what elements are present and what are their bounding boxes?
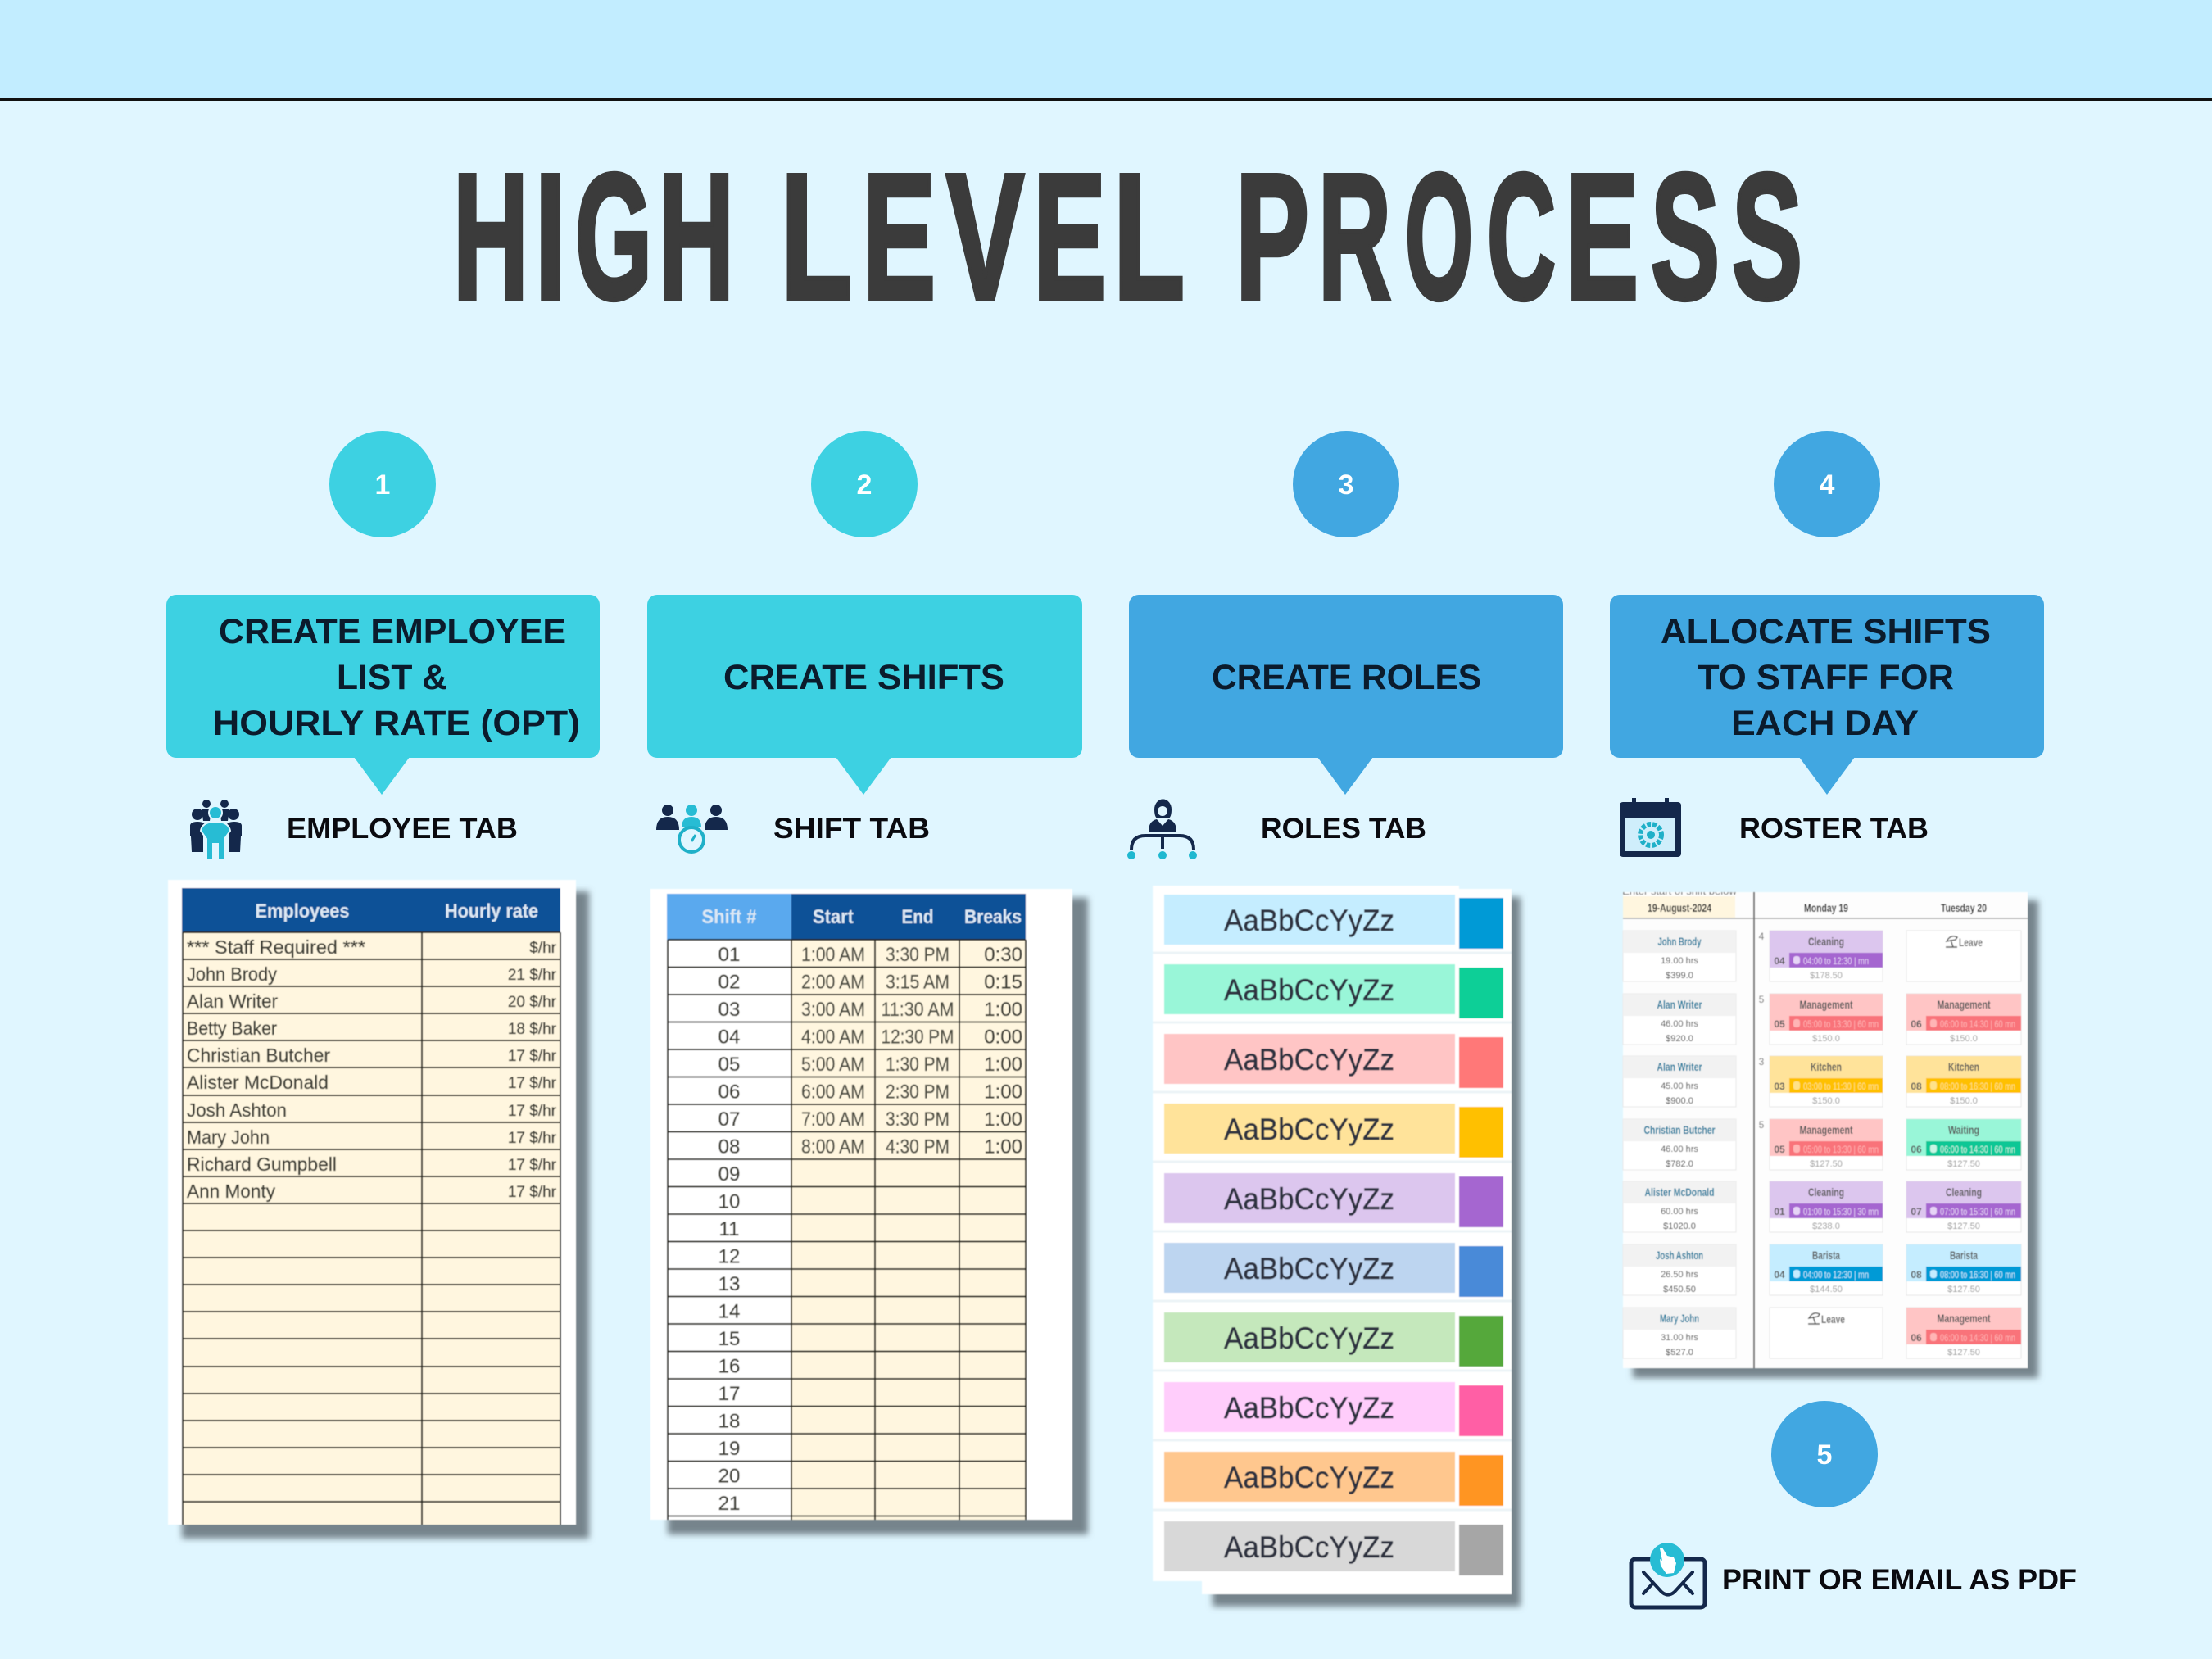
title: S <box>1651 138 1720 337</box>
roster day headers: Tuesday 20 <box>1941 901 1987 914</box>
role swatch: grey <box>1164 1521 1503 1575</box>
role swatch: orange: AaBbCcYyZz <box>1224 1461 1394 1494</box>
shift numbers: 10 <box>718 1191 740 1213</box>
staff card: Mary John: Mary John <box>1660 1312 1699 1325</box>
tuesday card: Alister cleaning: 07:00 to 15:30 | 60 mn <box>1940 1206 2015 1217</box>
title: V <box>946 138 1024 337</box>
tuesday card: Alan Writer management <box>1906 994 2021 1045</box>
title: S <box>1732 138 1802 337</box>
shift numbers <box>718 944 740 1515</box>
shift counts: 4 <box>1759 931 1765 942</box>
tuesday card: barista <box>1906 1244 2021 1295</box>
monday card: Christian management: 05 <box>1774 1144 1785 1155</box>
monday card: Alan Writer management: 05 <box>1774 1018 1785 1030</box>
shift breaks: 0:30 <box>984 944 1022 966</box>
staff card: Alister McDonald: 60.00 hrs <box>1661 1207 1698 1217</box>
tuesday card: waiting <box>1906 1119 2021 1170</box>
step number 2: 2 <box>857 469 872 501</box>
employee names: Ann Monty <box>187 1181 275 1202</box>
staff card: Alan Writer second: $900.0 <box>1666 1096 1693 1106</box>
shift breaks: 1:00 <box>984 999 1022 1021</box>
shift breaks: 1:00 <box>984 1054 1022 1076</box>
staff card: John Brody: 19.00 hrs <box>1661 956 1698 966</box>
hourly rates <box>508 940 557 1201</box>
tuesday card: barista: 08:00 to 16:30 | 60 mn <box>1940 1269 2015 1281</box>
employee names: Christian Butcher <box>187 1045 330 1066</box>
employee names: Josh Ashton <box>187 1099 287 1121</box>
panel: shift table <box>650 889 1088 1534</box>
tuesday card: kitchen: Kitchen <box>1948 1060 1979 1073</box>
employee names <box>187 936 365 1202</box>
title <box>453 138 1802 337</box>
panel: roles list <box>1153 886 1521 1607</box>
roster date header <box>1622 891 1737 918</box>
hourly rates: 17 $/hr <box>508 1184 557 1201</box>
monday card: Christian management: 05:00 to 13:30 | 60 mn <box>1803 1144 1879 1155</box>
staff card: Alan Writer second: Alan Writer <box>1657 1060 1702 1073</box>
role swatch: leaf green <box>1164 1312 1503 1367</box>
shift end times <box>882 944 954 1158</box>
icon: employees group <box>190 800 242 860</box>
role swatch: blue <box>1164 895 1503 949</box>
role swatch: blue: AaBbCcYyZz <box>1224 904 1394 937</box>
staff card: Christian Butcher <box>1623 1119 1736 1170</box>
shift end times: 2:30 PM <box>886 1081 950 1103</box>
shift end times: 3:15 AM <box>886 972 950 993</box>
role swatch: steel blue: AaBbCcYyZz <box>1224 1252 1394 1285</box>
title: E <box>1033 138 1106 337</box>
monday card: Alan Writer management: 05:00 to 13:30 | 60 mn <box>1803 1018 1879 1030</box>
role swatch: grey: AaBbCcYyZz <box>1224 1530 1394 1564</box>
shift end times: 4:30 PM <box>886 1135 950 1158</box>
callout: create employee list: LIST & <box>337 658 447 697</box>
monday card: John Brody cleaning <box>1770 931 1883 981</box>
staff card: Alister McDonald: $1020.0 <box>1663 1222 1696 1231</box>
staff card: Alister McDonald <box>1623 1181 1736 1232</box>
title: E <box>1566 138 1639 337</box>
tuesday card: Alan Writer management: Management <box>1937 998 1991 1011</box>
monday card: Alister cleaning <box>1770 1181 1883 1232</box>
tuesday card: barista: $127.50 <box>1947 1285 1980 1294</box>
shift start times <box>801 944 865 1158</box>
callout: create employee list: CREATE EMPLOYEE <box>219 612 566 651</box>
shift numbers: 02 <box>718 972 740 993</box>
hourly rates: $/hr <box>529 940 557 957</box>
tuesday card: barista: 08 <box>1911 1269 1922 1281</box>
tuesday card: kitchen: 08:00 to 16:30 | 60 mn <box>1940 1081 2015 1092</box>
shift end times: 3:30 PM <box>886 944 950 966</box>
employee names: Mary John <box>187 1126 270 1148</box>
staff card: Alan Writer <box>1623 994 1736 1045</box>
tuesday card: Alan Writer management: 06 <box>1911 1018 1922 1030</box>
hourly rates: 17 $/hr <box>508 1157 557 1174</box>
shift breaks: 0:15 <box>984 972 1022 993</box>
monday card: barista: Barista <box>1812 1249 1840 1262</box>
top band <box>0 0 2212 101</box>
employee names: Betty Baker <box>187 1018 277 1039</box>
role swatch: purple: AaBbCcYyZz <box>1224 1182 1394 1216</box>
tuesday card: barista: Barista <box>1950 1249 1978 1262</box>
shift table header: End <box>901 906 934 928</box>
hourly rates: 17 $/hr <box>508 1075 557 1092</box>
staff card: Christian Butcher: Christian Butcher <box>1643 1123 1716 1136</box>
monday card: John Brody cleaning: $178.50 <box>1810 971 1843 981</box>
title: C <box>1487 138 1556 337</box>
step number 5: 5 <box>1817 1439 1832 1471</box>
callout: allocate shifts: ALLOCATE SHIFTS <box>1661 612 1991 651</box>
monday card: barista: 04 <box>1774 1269 1785 1281</box>
shift table header <box>667 894 1026 940</box>
employee names: Alister McDonald <box>187 1072 329 1093</box>
monday card: Alister cleaning: $238.0 <box>1812 1222 1840 1231</box>
tuesday card: Mary John management: $127.50 <box>1947 1348 1980 1358</box>
tuesday card: waiting: 06 <box>1911 1144 1922 1155</box>
roster day headers <box>1804 901 1987 914</box>
hourly rates: 20 $/hr <box>508 994 557 1011</box>
shift end times: 3:30 PM <box>886 1108 950 1131</box>
shift breaks: 1:00 <box>984 1135 1022 1158</box>
monday card: kitchen: 03 <box>1774 1081 1785 1092</box>
monday card: kitchen: 03:00 to 11:30 | 60 mn <box>1803 1081 1879 1092</box>
step number 1 <box>329 431 436 537</box>
step number 4 <box>1774 431 1880 537</box>
staff card: Josh Ashton: 26.50 hrs <box>1661 1270 1698 1280</box>
shift table header: Breaks <box>964 906 1022 928</box>
shift numbers: 14 <box>718 1301 740 1322</box>
shift numbers: 09 <box>718 1163 740 1185</box>
shift numbers: 01 <box>718 944 740 966</box>
monday card: John Brody cleaning: 04 <box>1774 955 1785 967</box>
employee table header: Employees <box>256 900 349 922</box>
role swatch: yellow <box>1164 1104 1503 1158</box>
employee tab label: EMPLOYEE TAB <box>287 813 518 845</box>
monday card: John Brody cleaning: 04:00 to 12:30 | mn <box>1803 955 1869 967</box>
panel: roster <box>1622 885 2038 1378</box>
tuesday card: kitchen <box>1906 1056 2021 1107</box>
monday card: John Brody cleaning: Cleaning <box>1808 935 1844 948</box>
staff card: Mary John: $527.0 <box>1666 1348 1693 1358</box>
shift breaks: 1:00 <box>984 1108 1022 1131</box>
hourly rates: 17 $/hr <box>508 1130 557 1147</box>
tuesday card: Mary John management: Management <box>1937 1312 1991 1325</box>
shift end times: 1:30 PM <box>886 1054 950 1076</box>
shift counts: 5 <box>1759 1119 1765 1131</box>
shift table header: Start <box>813 906 854 928</box>
monday card: barista: 04:00 to 12:30 | mn <box>1803 1269 1869 1281</box>
staff card: Josh Ashton <box>1623 1244 1736 1295</box>
shift counts: 5 <box>1759 994 1765 1005</box>
tuesday card: John Brody leave: Leave <box>1959 936 1983 949</box>
monday card: barista: $144.50 <box>1810 1285 1843 1294</box>
title: I <box>535 138 566 337</box>
roster date header: 19-August-2024 <box>1648 901 1711 914</box>
shift numbers: 05 <box>718 1054 740 1076</box>
staff card: Mary John <box>1623 1308 1736 1358</box>
panel: employee table <box>168 880 589 1539</box>
employee table body <box>183 932 560 1525</box>
staff card: John Brody <box>1623 931 1736 981</box>
callout: create employee list <box>166 595 600 795</box>
employee names: *** Staff Required *** <box>187 936 365 958</box>
callout: allocate shifts: TO STAFF FOR <box>1698 658 1954 697</box>
staff card: Alan Writer second <box>1623 1056 1736 1107</box>
shift start times: 4:00 AM <box>801 1026 865 1049</box>
role swatch: pink <box>1164 1382 1503 1436</box>
staff card: Christian Butcher: 46.00 hrs <box>1661 1145 1698 1154</box>
staff card: Alan Writer: 46.00 hrs <box>1661 1019 1698 1029</box>
shift tab label: SHIFT TAB <box>773 813 930 845</box>
staff card: Mary John: 31.00 hrs <box>1661 1333 1698 1343</box>
shift start times: 7:00 AM <box>801 1108 865 1131</box>
hourly rates: 17 $/hr <box>508 1048 557 1065</box>
role swatch: green <box>1164 964 1503 1018</box>
shift numbers: 20 <box>718 1465 740 1488</box>
monday card: Christian management: Management <box>1799 1123 1853 1136</box>
shift numbers: 17 <box>718 1383 740 1405</box>
shift counts <box>1759 931 1765 1131</box>
tuesday card: Alister cleaning <box>1906 1181 2021 1232</box>
staff card: Alan Writer: $920.0 <box>1666 1034 1693 1044</box>
tuesday card: Alan Writer management: 06:00 to 14:30 | 60 mn <box>1940 1018 2015 1030</box>
step number 2 <box>811 431 918 537</box>
monday card: barista <box>1770 1244 1883 1295</box>
monday card: Alan Writer management: Management <box>1799 998 1853 1011</box>
step number 4: 4 <box>1820 469 1835 501</box>
shift numbers: 07 <box>718 1108 740 1131</box>
tuesday card: waiting: $127.50 <box>1947 1159 1980 1169</box>
role swatch: red <box>1164 1034 1503 1088</box>
icon: roster calendar <box>1620 798 1681 857</box>
role swatch: pink: AaBbCcYyZz <box>1224 1391 1394 1425</box>
shift numbers: 13 <box>718 1273 740 1295</box>
step number 3: 3 <box>1339 469 1353 501</box>
staff card: Christian Butcher: $782.0 <box>1666 1159 1693 1169</box>
tuesday card: Mary John management: 06:00 to 14:30 | 60 mn <box>1940 1332 2015 1344</box>
tuesday card: kitchen: $150.0 <box>1950 1096 1978 1106</box>
title: L <box>781 138 852 337</box>
shift start times: 5:00 AM <box>801 1054 865 1076</box>
monday card: Alan Writer management: $150.0 <box>1812 1034 1840 1044</box>
shift end times: 11:30 AM <box>882 999 954 1021</box>
shift start times: 1:00 AM <box>801 944 865 966</box>
shift end times: 12:30 PM <box>882 1026 954 1049</box>
tuesday card: Alister cleaning: Cleaning <box>1946 1185 1982 1199</box>
roster date header: Enter start of shift below <box>1622 885 1737 897</box>
roster tab label: ROSTER TAB <box>1739 813 1929 845</box>
shift breaks: 0:00 <box>984 1026 1022 1049</box>
hourly rates: 17 $/hr <box>508 1103 557 1120</box>
shift start times: 2:00 AM <box>801 972 865 993</box>
shift numbers: 12 <box>718 1245 740 1268</box>
employee table header <box>182 888 560 932</box>
tuesday card: Mary John management: 06 <box>1911 1332 1922 1344</box>
shift numbers: 15 <box>718 1328 740 1350</box>
callout: create employee list: HOURLY RATE (OPT) <box>213 704 580 743</box>
step number 3 <box>1293 431 1399 537</box>
staff card: Alan Writer second: 45.00 hrs <box>1661 1081 1698 1091</box>
staff card: Alan Writer: Alan Writer <box>1657 998 1702 1011</box>
monday card: Christian management <box>1770 1119 1883 1170</box>
role swatch: orange <box>1164 1452 1503 1506</box>
callout: create roles <box>1129 595 1563 795</box>
role swatch: red: AaBbCcYyZz <box>1224 1043 1394 1077</box>
employee names: Alan Writer <box>187 990 278 1012</box>
roles tab label: ROLES TAB <box>1261 813 1426 845</box>
print or email label: PRINT OR EMAIL AS PDF <box>1722 1564 2077 1596</box>
tuesday card: Mary John management <box>1906 1308 2021 1358</box>
callout: allocate shifts <box>1610 595 2044 795</box>
staff card: Josh Ashton: $450.50 <box>1663 1285 1696 1294</box>
shift start times: 8:00 AM <box>801 1135 865 1158</box>
role swatch: green: AaBbCcYyZz <box>1224 973 1394 1007</box>
monday card: kitchen: Kitchen <box>1811 1060 1842 1073</box>
role swatch: steel blue <box>1164 1243 1503 1297</box>
step number 5 <box>1771 1401 1878 1507</box>
hourly rates: 18 $/hr <box>508 1021 557 1038</box>
callout: allocate shifts: EACH DAY <box>1731 704 1919 743</box>
role swatch: purple <box>1164 1173 1503 1227</box>
staff card: Alister McDonald: Alister McDonald <box>1645 1185 1714 1199</box>
staff card: John Brody: $399.0 <box>1666 971 1693 981</box>
tuesday card: waiting: 06:00 to 14:30 | 60 mn <box>1940 1144 2015 1155</box>
shift numbers: 04 <box>718 1026 740 1049</box>
monday card: Mary John leave <box>1770 1308 1883 1358</box>
shift numbers: 19 <box>718 1438 740 1460</box>
tuesday card: Alan Writer management: $150.0 <box>1950 1034 1978 1044</box>
shift breaks: 1:00 <box>984 1081 1022 1103</box>
tuesday card: Alister cleaning: 07 <box>1911 1206 1922 1217</box>
staff card: John Brody: John Brody <box>1658 935 1702 948</box>
shift numbers: 18 <box>718 1411 740 1432</box>
title: H <box>453 138 528 337</box>
monday card: kitchen <box>1770 1056 1883 1107</box>
callout: create shifts: CREATE SHIFTS <box>723 658 1004 697</box>
title: P <box>1235 138 1309 337</box>
step number 1: 1 <box>375 469 390 501</box>
shift breaks <box>984 944 1022 1158</box>
role swatch: leaf green: AaBbCcYyZz <box>1224 1321 1394 1355</box>
icon: roles hierarchy <box>1127 799 1197 859</box>
monday card: Alister cleaning: 01:00 to 15:30 | 30 mn <box>1803 1206 1879 1217</box>
shift numbers: 21 <box>718 1493 740 1515</box>
tuesday card: waiting: Waiting <box>1948 1123 1979 1136</box>
shift numbers: 08 <box>718 1135 740 1158</box>
title: R <box>1318 138 1391 337</box>
hourly rates: 21 $/hr <box>508 967 557 984</box>
roster day headers: Monday 19 <box>1804 901 1848 914</box>
monday card: kitchen: $150.0 <box>1812 1096 1840 1106</box>
title: H <box>659 138 734 337</box>
shift numbers: 16 <box>718 1355 740 1378</box>
employee names: John Brody <box>187 963 277 985</box>
shift counts: 3 <box>1759 1056 1765 1067</box>
employee table header: Hourly rate <box>445 900 538 922</box>
callout: create roles: CREATE ROLES <box>1212 658 1481 697</box>
shift numbers: 11 <box>719 1218 739 1240</box>
staff card: Josh Ashton: Josh Ashton <box>1656 1249 1703 1262</box>
title: O <box>1405 138 1473 337</box>
shift table header: Shift # <box>701 906 757 928</box>
monday card: Alan Writer management <box>1770 994 1883 1045</box>
shift table body <box>791 940 1026 1520</box>
shift start times: 3:00 AM <box>801 999 865 1021</box>
monday card: Christian management: $127.50 <box>1810 1159 1843 1169</box>
shift numbers: 03 <box>718 999 740 1021</box>
shift numbers: 06 <box>718 1081 740 1103</box>
icon: email with pointer <box>1631 1543 1705 1607</box>
monday card: Alister cleaning: Cleaning <box>1808 1185 1844 1199</box>
title: E <box>863 138 936 337</box>
shift start times: 6:00 AM <box>801 1081 865 1103</box>
callout: create shifts <box>647 595 1082 795</box>
monday card: Alister cleaning: 01 <box>1774 1206 1785 1217</box>
tuesday card: John Brody leave <box>1906 931 2021 981</box>
title: G <box>575 138 652 337</box>
icon: shift team clock <box>656 805 728 852</box>
role swatch: yellow: AaBbCcYyZz <box>1224 1113 1394 1146</box>
tuesday card: kitchen: 08 <box>1911 1081 1922 1092</box>
tuesday card: Alister cleaning: $127.50 <box>1947 1222 1980 1231</box>
employee names: Richard Gumpbell <box>187 1154 337 1175</box>
title: L <box>1113 138 1185 337</box>
monday card: Mary John leave: Leave <box>1821 1312 1845 1326</box>
